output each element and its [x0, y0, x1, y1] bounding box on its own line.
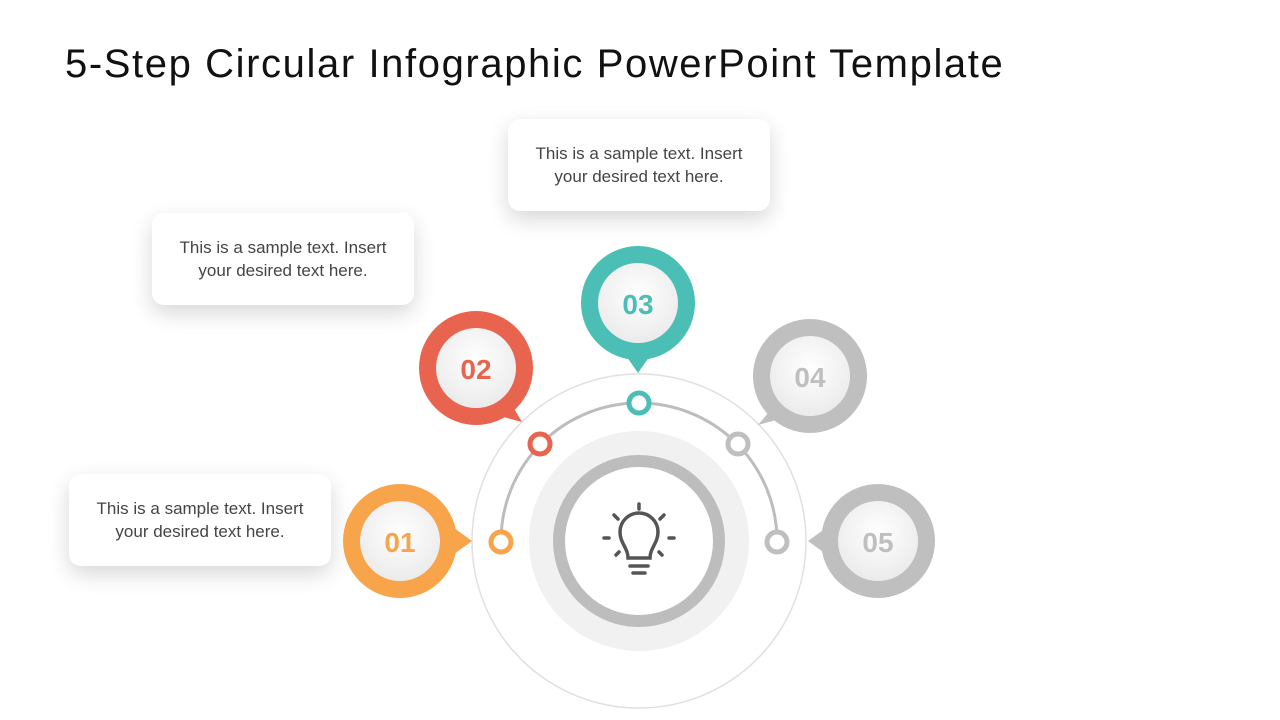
arc path: [501, 403, 777, 541]
center hub: [529, 431, 749, 651]
marker 02: [419, 311, 533, 425]
icon: light bulb: [604, 504, 674, 573]
marker 03: [581, 246, 695, 373]
marker 05: [808, 484, 935, 598]
marker 04: 04: [794, 362, 826, 393]
dots: [491, 393, 787, 552]
marker 01: [343, 484, 472, 598]
text box: step 2: This is a sample text. Insert: [180, 238, 386, 257]
text box: step 3: [508, 119, 770, 211]
text box: step 2: your desired text here.: [198, 261, 368, 280]
marker 05: 05: [862, 527, 894, 558]
text box: step 1: [69, 474, 331, 566]
text box: step 3: This is a sample text. Insert: [536, 144, 742, 163]
outer circle: [472, 374, 806, 708]
marker 04: [753, 319, 867, 433]
text box: step 2: [152, 213, 414, 305]
marker 03: 03: [622, 289, 654, 320]
marker 02: 02: [460, 354, 492, 385]
marker 01: 01: [384, 527, 416, 558]
text box: step 3: your desired text here.: [554, 167, 724, 186]
title: 5-Step Circular Infographic PowerPoint Template: [65, 42, 1004, 86]
text box: step 1: your desired text here.: [115, 522, 285, 541]
text box: step 1: This is a sample text. Insert: [97, 499, 303, 518]
